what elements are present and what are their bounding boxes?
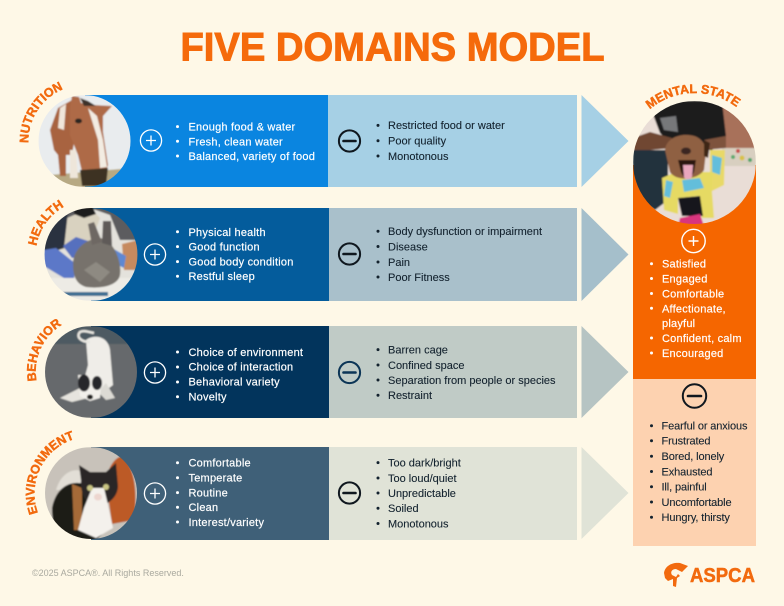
negative list: Barren cage <box>388 344 448 356</box>
negative list: Confined space <box>388 360 464 372</box>
panel: behavior negative <box>329 326 577 418</box>
plus icon <box>144 362 166 383</box>
label: health: HEALTH <box>28 200 64 246</box>
positive list <box>176 122 315 163</box>
negative list <box>376 457 461 530</box>
negative list: Ill, painful <box>662 482 707 494</box>
row: environment <box>26 430 628 540</box>
negative list: Too loud/quiet <box>388 473 456 485</box>
negative list: Hungry, thirsty <box>662 512 730 524</box>
label: behavior: BEHAVIOR <box>26 319 62 382</box>
panel: health positive <box>91 208 329 301</box>
negative list: Too dark/bright <box>388 457 461 469</box>
row: behavior <box>26 319 628 418</box>
positive list: playful <box>662 318 695 330</box>
negative list: Unpredictable <box>388 488 456 500</box>
panel: health negative <box>329 208 577 301</box>
negative list: Exhausted <box>662 466 712 478</box>
panel: positive mental state <box>633 165 756 380</box>
positive list: Behavioral variety <box>188 377 280 389</box>
plus icon <box>682 229 705 253</box>
label: environment: ENVIRONMENT <box>26 430 72 515</box>
negative list <box>376 120 505 163</box>
row: nutrition <box>19 82 628 187</box>
arrow: behavior <box>582 326 628 418</box>
minus icon <box>339 243 360 265</box>
panel: environment negative <box>329 447 577 540</box>
positive list: Engaged <box>662 274 708 286</box>
panel: environment positive <box>91 447 329 540</box>
plus icon <box>140 130 162 151</box>
positive list: Confident, calm <box>662 333 742 345</box>
photo: cat <box>44 447 138 540</box>
positive list: Good function <box>188 242 260 254</box>
panel: nutrition negative <box>328 95 577 187</box>
positive list: Comfortable <box>662 288 724 300</box>
positive list: Choice of environment <box>188 347 303 359</box>
positive list: Affectionate, <box>662 303 726 315</box>
negative list: Uncomfortable <box>662 497 731 509</box>
negative list: Fearful or anxious <box>662 420 748 432</box>
positive list: Physical health <box>188 227 266 239</box>
negative list: Disease <box>388 241 428 253</box>
positive list: Balanced, variety of food <box>188 151 315 163</box>
plus icon <box>144 483 166 504</box>
negative list: Frustrated <box>662 436 710 448</box>
photo: rabbit <box>44 206 138 301</box>
negative list: Separation from people or species <box>388 375 556 387</box>
plus icon <box>144 244 166 265</box>
negative list: Bored, lonely <box>662 451 725 463</box>
positive list <box>176 227 294 283</box>
negative list: Poor quality <box>388 136 447 148</box>
minus icon <box>683 384 706 408</box>
negative list: Body dysfunction or impairment <box>388 226 542 238</box>
negative list: Restraint <box>388 390 432 402</box>
negative list: Poor Fitness <box>388 272 450 284</box>
positive list: Choice of interaction <box>188 362 293 374</box>
positive list: Comfortable <box>188 458 251 470</box>
positive list <box>650 259 742 360</box>
positive list: Temperate <box>188 473 242 485</box>
photo: horse <box>38 95 132 187</box>
positive list: Enough food & water <box>188 122 296 134</box>
icon: ASPCA horse mark <box>664 563 688 587</box>
logo: ASPCA: ASPCA <box>690 565 755 587</box>
positive list: Good body condition <box>188 256 294 268</box>
positive list: Encouraged <box>662 348 724 360</box>
negative list <box>376 226 542 284</box>
photo: dog in pajamas <box>633 101 756 226</box>
arrow: nutrition <box>582 95 628 187</box>
minus icon <box>339 130 360 152</box>
footer copyright: ©2025 ASPCA®. All Rights Reserved. <box>32 568 184 578</box>
negative list: Restricted food or water <box>388 120 505 132</box>
panel: behavior positive <box>91 326 329 418</box>
panel: nutrition positive <box>85 95 328 187</box>
negative list: Monotonous <box>388 151 449 163</box>
negative list <box>376 344 556 402</box>
panel: negative mental state <box>633 379 756 546</box>
negative list: Monotonous <box>388 518 449 530</box>
positive list <box>176 347 303 404</box>
arrow: environment <box>582 447 628 539</box>
row: health <box>28 200 628 301</box>
negative list <box>650 420 748 524</box>
logo: ASPCA <box>664 563 755 587</box>
positive list: Routine <box>188 488 228 500</box>
positive list: Clean <box>188 502 218 514</box>
negative list: Soiled <box>388 503 419 515</box>
panel: mental state <box>633 84 756 546</box>
negative list: Pain <box>388 257 410 269</box>
arrow: health <box>582 208 628 301</box>
label: mental state: MENTAL STATE <box>645 84 742 110</box>
minus icon <box>339 362 360 383</box>
positive list: Novelty <box>188 392 227 404</box>
positive list: Interest/variety <box>188 517 264 529</box>
minus icon <box>339 482 360 504</box>
positive list: Satisfied <box>662 259 706 271</box>
label: nutrition: NUTRITION <box>19 82 63 142</box>
positive list: Restful sleep <box>188 271 255 283</box>
title: FIVE DOMAINS MODEL <box>180 26 604 70</box>
positive list <box>176 458 264 529</box>
photo: dog stretching <box>44 326 138 418</box>
positive list: Fresh, clean water <box>188 136 283 148</box>
